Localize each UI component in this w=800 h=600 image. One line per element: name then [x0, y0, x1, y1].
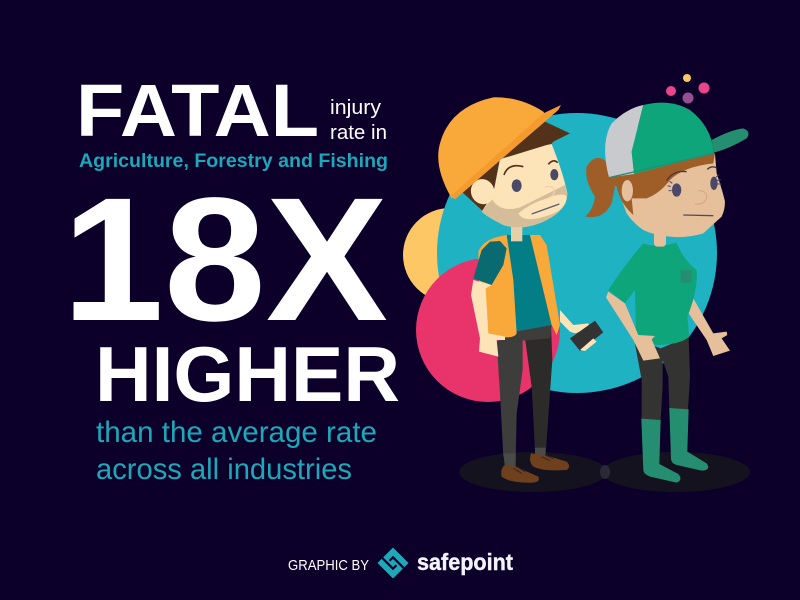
heading: FATAL: FATAL — [76, 69, 319, 152]
woman head — [585, 103, 749, 247]
text: injury rate in: injury — [330, 97, 381, 119]
ground shadows — [459, 452, 750, 492]
text: comparison: across all industries — [96, 453, 352, 486]
heading: HIGHER: HIGHER — [95, 330, 400, 418]
subheading: industry: Agriculture, Forestry and Fishing — [79, 151, 388, 172]
text: comparison: than the average rate — [96, 416, 377, 449]
text: comparison — [96, 416, 377, 486]
decorative dots — [666, 74, 710, 104]
text: graphic by: GRAPHIC BY — [288, 558, 369, 574]
text: safepoint: safepoint — [417, 549, 513, 575]
footer credit — [288, 547, 513, 579]
illustration: woman — [585, 103, 749, 483]
text: injury rate in: rate in — [330, 122, 387, 144]
text: injury rate in — [330, 97, 387, 144]
illustration: man — [438, 97, 603, 483]
woman lower body — [606, 243, 730, 483]
man head — [438, 97, 570, 241]
icon: safepoint logo — [377, 547, 409, 579]
big number: 18X: 18X — [62, 162, 388, 358]
background circles — [403, 113, 717, 402]
man lower body — [471, 235, 603, 483]
